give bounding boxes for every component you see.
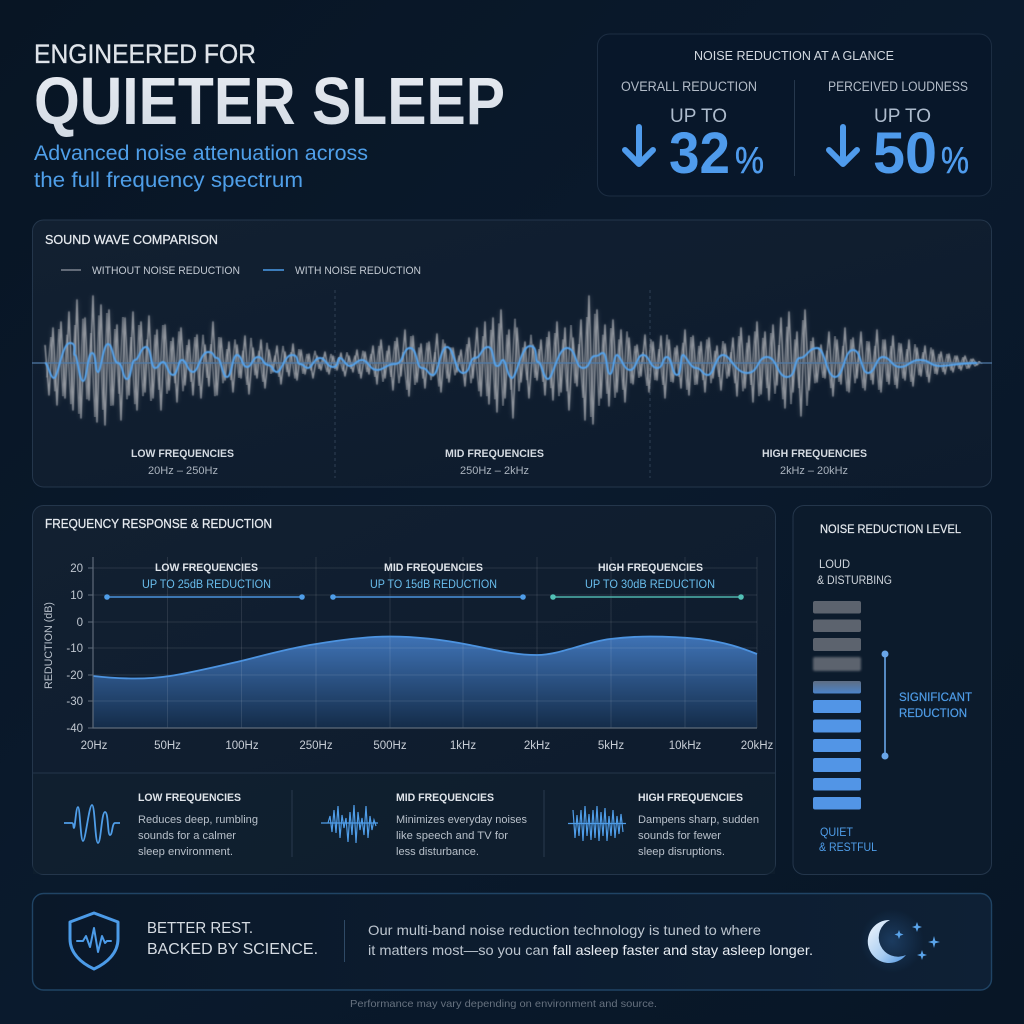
icon: high frequency wave <box>568 806 626 841</box>
stat: overall reduction <box>621 79 764 186</box>
annotation: mid band: MID FREQUENCIES <box>384 562 483 574</box>
banner body text: it matters most—so you can fall asleep faster and stay asleep longer. <box>368 942 813 958</box>
label: quiet: QUIET <box>820 827 853 839</box>
y axis labels: -40 <box>66 723 83 735</box>
banner body text: Our multi-band noise reduction technology is tuned to where <box>368 922 761 938</box>
legend <box>61 265 421 277</box>
x axis labels: 1kHz <box>450 740 476 752</box>
subtitle: Advanced noise attenuation across <box>34 142 368 165</box>
footnote: Performance may vary depending on environment and source. <box>350 998 657 1010</box>
subtitle: the full frequency spectrum <box>34 169 303 192</box>
explainer: high frequencies: Dampens sharp, sudden <box>638 814 759 826</box>
significant reduction bracket <box>882 650 973 760</box>
explainer: low frequencies <box>64 792 258 858</box>
panel: noise reduction at a glance <box>598 34 992 196</box>
panel: sound wave comparison <box>32 220 992 487</box>
eyebrow heading: ENGINEERED FOR <box>34 39 256 69</box>
band label: high: 2kHz – 20kHz <box>780 465 848 477</box>
icon: moon and stars <box>860 909 940 973</box>
band label: mid: MID FREQUENCIES <box>445 448 544 460</box>
significant reduction bracket: REDUCTION <box>899 706 967 720</box>
level meter bars <box>813 601 861 810</box>
frequency response chart <box>43 557 774 752</box>
band label: mid <box>445 448 544 477</box>
banner heading <box>147 920 318 958</box>
explainer: high frequencies: sounds for fewer <box>638 830 721 842</box>
explainer: high frequencies <box>568 792 759 858</box>
banner heading: BETTER REST. <box>147 920 253 937</box>
panel: noise reduction level <box>793 506 992 874</box>
legend: WITHOUT NOISE REDUCTION <box>92 265 240 277</box>
significant reduction bracket: SIGNIFICANT <box>899 690 973 704</box>
x axis labels: 10kHz <box>669 740 702 752</box>
panel: frequency response and reduction <box>32 506 776 874</box>
main heading: QUIETER SLEEP <box>34 64 505 139</box>
explainer: low frequencies: LOW FREQUENCIES <box>138 792 241 804</box>
x axis labels: 250Hz <box>299 740 333 752</box>
band label: mid: 250Hz – 2kHz <box>460 465 529 477</box>
annotation: high band <box>550 562 744 600</box>
explainer: mid frequencies: Minimizes everyday noises <box>396 814 527 826</box>
y axis labels <box>66 563 83 735</box>
label: quiet <box>819 827 878 854</box>
wave heading: SOUND WAVE COMPARISON <box>45 233 218 247</box>
title block <box>34 39 505 192</box>
icon: low frequency wave <box>64 805 120 843</box>
x axis labels: 50Hz <box>154 740 181 752</box>
x axis labels: 5kHz <box>598 740 624 752</box>
stat: perceived loudness: % <box>941 140 969 181</box>
x axis labels: 20Hz <box>81 740 108 752</box>
waveform chart <box>32 296 992 425</box>
reduction area <box>93 636 757 728</box>
explainer: mid frequencies: MID FREQUENCIES <box>396 792 494 804</box>
stat: overall reduction: OVERALL REDUCTION <box>621 79 757 94</box>
stat: perceived loudness <box>828 79 969 186</box>
level heading: NOISE REDUCTION LEVEL <box>820 522 961 536</box>
x axis labels: 500Hz <box>373 740 407 752</box>
glance heading: NOISE REDUCTION AT A GLANCE <box>694 48 894 63</box>
stat: overall reduction: UP TO <box>670 106 727 127</box>
label: loud <box>817 559 892 587</box>
x axis labels: 20kHz <box>741 740 774 752</box>
y axis title: REDUCTION (dB) <box>43 602 55 689</box>
icon: mid frequency wave <box>321 805 378 843</box>
annotation: low band: UP TO 25dB REDUCTION <box>142 579 271 591</box>
explainer: low frequencies: sleep environment. <box>138 846 233 858</box>
label: loud: & DISTURBING <box>817 575 892 587</box>
x axis labels <box>81 740 774 752</box>
blue wave with reduction <box>45 343 977 381</box>
subtitle <box>34 142 368 192</box>
annotation: mid band: UP TO 15dB REDUCTION <box>370 579 497 591</box>
stat: perceived loudness: PERCEIVED LOUDNESS <box>828 79 968 94</box>
explainer: high frequencies: sleep disruptions. <box>638 846 725 858</box>
y axis labels: -20 <box>66 670 83 682</box>
explainer: mid frequencies <box>321 792 527 858</box>
label: quiet: & RESTFUL <box>819 842 878 854</box>
icon: shield with wave <box>70 913 118 969</box>
band label: low <box>131 448 234 477</box>
stat: perceived loudness: UP TO <box>874 106 931 127</box>
y axis labels: 0 <box>77 617 83 629</box>
annotation: high band: HIGH FREQUENCIES <box>598 562 703 574</box>
stat: overall reduction: 32 <box>669 121 730 186</box>
x axis labels: 2kHz <box>524 740 550 752</box>
annotation: mid band <box>330 562 526 600</box>
stat: overall reduction: % <box>735 140 764 181</box>
annotation: high band: UP TO 30dB REDUCTION <box>585 579 715 591</box>
band label: low: LOW FREQUENCIES <box>131 448 234 460</box>
banner body text <box>368 922 813 958</box>
banner heading: BACKED BY SCIENCE. <box>147 941 318 958</box>
y axis labels: -10 <box>66 643 83 655</box>
band label: low: 20Hz – 250Hz <box>148 465 218 477</box>
y axis labels: 10 <box>70 590 83 602</box>
explainer: mid frequencies: less disturbance. <box>396 846 479 858</box>
stat: perceived loudness: 50 <box>873 121 937 186</box>
chart heading: FREQUENCY RESPONSE & REDUCTION <box>45 517 272 531</box>
panel: better rest banner <box>32 894 992 990</box>
band label: high: HIGH FREQUENCIES <box>762 448 867 460</box>
legend: WITH NOISE REDUCTION <box>295 265 421 277</box>
explainer: low frequencies: Reduces deep, rumbling <box>138 814 258 826</box>
explainer: low frequencies: sounds for a calmer <box>138 830 236 842</box>
annotation: low band: LOW FREQUENCIES <box>155 562 258 574</box>
explainer: mid frequencies: like speech and TV for <box>396 830 508 842</box>
band label: high <box>762 448 867 477</box>
label: loud: LOUD <box>819 559 850 571</box>
y axis labels: -30 <box>66 696 83 708</box>
explainer: high frequencies: HIGH FREQUENCIES <box>638 792 743 804</box>
y axis labels: 20 <box>70 563 83 575</box>
grey wave without reduction <box>45 296 982 425</box>
x axis labels: 100Hz <box>225 740 259 752</box>
annotation: low band <box>104 562 305 600</box>
